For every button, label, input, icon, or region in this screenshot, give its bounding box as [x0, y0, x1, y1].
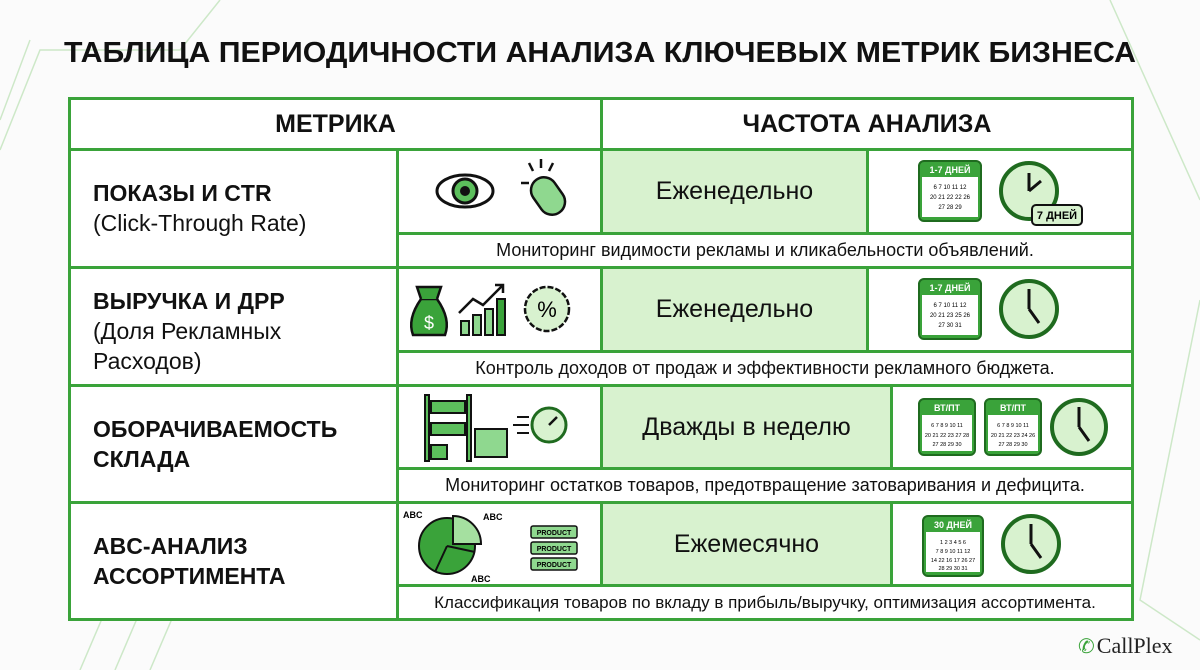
row 2 frequency: Еженедельно — [656, 295, 813, 323]
row 2 metric: ВЫРУЧКА И ДРР — [93, 288, 285, 314]
table — [68, 97, 1134, 621]
row 4 schedule icons: 14 22 16 17 26 27 — [931, 558, 975, 564]
row 4 icons: ABC — [483, 512, 503, 522]
row 4 schedule icons: 1 2 3 4 5 6 — [940, 540, 966, 546]
row 2 icons — [396, 266, 603, 353]
row 3 schedule icons: 27 28 29 30 — [998, 442, 1028, 448]
row 1 metric — [68, 148, 399, 269]
row 2 schedule icons: 27 30 31 — [938, 323, 962, 329]
logo: CallPlex: CallPlex — [1097, 633, 1173, 658]
row 4 icons — [396, 501, 603, 587]
row 4 schedule icons: 30 ДНЕЙ — [934, 519, 972, 530]
row 4 metric — [68, 501, 399, 621]
row 3 schedule icons: 6 7 8 9 10 11 — [931, 423, 963, 429]
header: frequency: ЧАСТОТА АНАЛИЗА — [743, 110, 991, 138]
row 1 schedule icons: 20 21 22 22 26 — [930, 195, 971, 201]
row 3 schedule icons — [890, 384, 1134, 470]
row 4 schedule icons: 28 29 30 31 — [938, 566, 968, 572]
header: frequency — [600, 97, 1134, 151]
row 3 metric: СКЛАДА — [93, 446, 190, 472]
row 3 description: Мониторинг остатков товаров, предотвращение затоваривания и дефицита. — [445, 475, 1085, 495]
row 3 schedule icons: 20 21 22 23 24 26 — [991, 433, 1035, 439]
row 2 metric: Расходов) — [93, 348, 202, 374]
row 1 metric: ПОКАЗЫ И CTR — [93, 180, 272, 206]
row 2 schedule icons: 6 7 10 11 12 — [934, 303, 967, 309]
title: ТАБЛИЦА ПЕРИОДИЧНОСТИ АНАЛИЗА КЛЮЧЕВЫХ МЕТРИК БИЗНЕСА — [64, 37, 1136, 69]
header: metric — [68, 97, 603, 151]
row 3 frequency: Дважды в неделю — [642, 412, 851, 440]
row 2 schedule icons — [866, 266, 1134, 353]
row 1 schedule icons: 7 ДНЕЙ — [1037, 209, 1077, 222]
row 3 schedule icons: ВТ/ПТ — [1000, 403, 1027, 413]
row 4 icons: ABC — [471, 574, 491, 584]
row 2 description — [396, 350, 1134, 387]
row 1 frequency: Еженедельно — [656, 177, 813, 205]
row 2 schedule icons: 20 21 23 25 26 — [930, 313, 971, 319]
row 3 frequency — [600, 384, 893, 470]
row 4 description — [396, 584, 1134, 621]
row 2 frequency — [600, 266, 869, 353]
row 3 schedule icons: 6 7 8 9 10 11 — [997, 423, 1029, 429]
row 4 description: Классификация товаров по вкладу в прибыль/выручку, оптимизация ассортимента. — [434, 592, 1096, 612]
row 2 icons: % — [537, 297, 557, 322]
logo: CallPlex: ✆ — [1078, 636, 1095, 658]
row 1 schedule icons: 1-7 ДНЕЙ — [930, 164, 970, 175]
row 1 schedule icons: 6 7 10 11 12 — [934, 185, 967, 191]
row 4 schedule icons — [890, 501, 1134, 587]
row 1 frequency — [600, 148, 869, 235]
row 2 description: Контроль доходов от продаж и эффективности рекламного бюджета. — [475, 358, 1055, 378]
row 4 icons: PRODUCT — [537, 562, 572, 569]
row 3 icons — [396, 384, 603, 470]
row 3 metric: ОБОРАЧИВАЕМОСТЬ — [93, 416, 337, 442]
header: metric: МЕТРИКА — [275, 110, 396, 138]
row 3 schedule icons: 27 28 29 30 — [932, 442, 962, 448]
row 1 schedule icons: 27 28 29 — [938, 205, 962, 211]
row 3 schedule icons: ВТ/ПТ — [934, 403, 961, 413]
row 2 metric: (Доля Рекламных — [93, 318, 281, 344]
row 4 icons: PRODUCT — [537, 530, 572, 537]
row 1 description — [396, 232, 1134, 269]
row 1 schedule icons — [866, 148, 1134, 235]
row 2 metric — [68, 266, 399, 387]
row 2 icons: $ — [424, 313, 434, 333]
row 1 description: Мониторинг видимости рекламы и кликабельности объявлений. — [496, 240, 1034, 260]
row 4 icons: ABC — [403, 510, 423, 520]
row 3 metric — [68, 384, 399, 504]
row 4 metric: ABC-АНАЛИЗ — [93, 533, 248, 559]
row 4 schedule icons: 7 8 9 10 11 12 — [936, 549, 970, 555]
row 3 description — [396, 467, 1134, 504]
row 1 icons — [396, 148, 603, 235]
row 4 frequency — [600, 501, 893, 587]
row 4 metric: АССОРТИМЕНТА — [93, 563, 286, 589]
row 4 frequency: Ежемесячно — [674, 530, 819, 558]
row 4 icons: PRODUCT — [537, 546, 572, 553]
row 3 schedule icons: 20 21 22 23 27 28 — [925, 433, 969, 439]
row 1 metric: (Click-Through Rate) — [93, 210, 306, 236]
row 2 schedule icons: 1-7 ДНЕЙ — [930, 282, 970, 293]
